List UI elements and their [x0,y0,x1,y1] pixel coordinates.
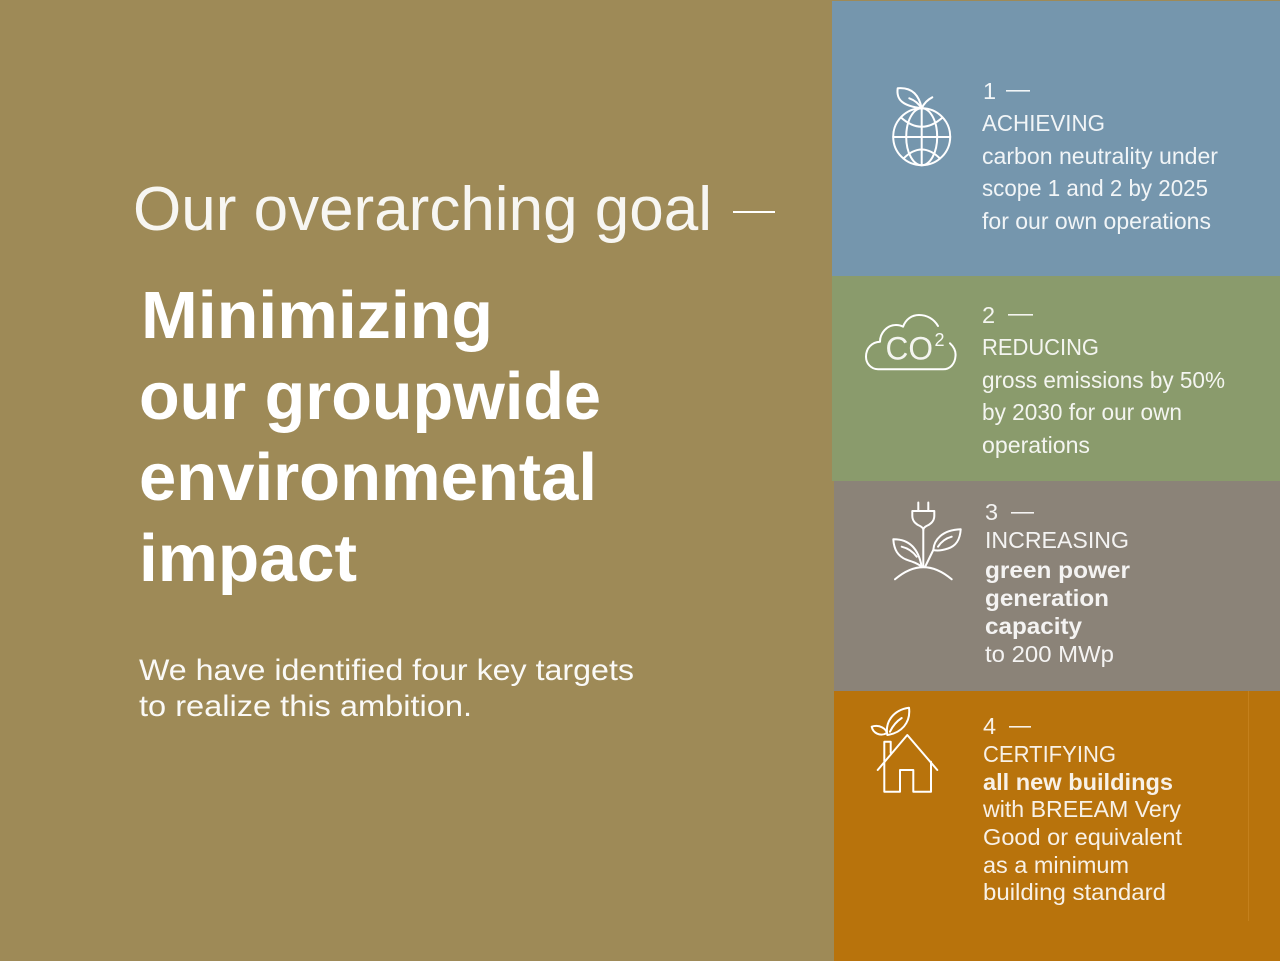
icon: CO2 cloud [866,315,956,369]
text: target 4: with BREEAM Very [982,796,1181,822]
text: target 2: gross emissions by 50% [982,367,1225,393]
main heading: environmental [139,440,597,515]
text: target 1: ACHIEVING [982,110,1105,136]
text: target 3: to 200 MWp [985,641,1114,667]
text: target 1: 1 [983,78,996,104]
text: target 4: all new buildings [983,769,1173,795]
text: target 4: Good or equivalent [983,824,1182,850]
intro text [139,654,634,723]
text: target 4: 4 [983,713,996,739]
text: target 1: for our own operations [982,208,1211,234]
text: target 2: REDUCING [982,334,1099,360]
text: target 3: 3 [985,499,998,525]
panel 3: increasing [834,481,1280,691]
panel 1: achieving [832,1,1280,276]
text: target 3: capacity [985,613,1082,639]
text: target 3: generation [985,585,1109,611]
text: target 2: 2 [982,302,995,328]
icon: house with leaves [872,708,937,792]
icon: plug plant [893,502,961,579]
text: target 3: green power [985,557,1130,583]
icon: apple globe [893,88,950,165]
text: target 1 [982,78,1218,234]
text: target 1: scope 1 and 2 by 2025 [982,175,1208,201]
icon: CO2 cloud: 2 [934,330,945,350]
text: target 4 [982,713,1182,905]
intro text: We have identified four key targets [139,654,634,687]
main heading: Minimizing [141,278,493,353]
text: target 3: INCREASING [985,527,1129,553]
text: target 4: as a minimum [983,852,1129,878]
text: target 4: building standard [983,879,1166,905]
panel 4: certifying [834,691,1280,961]
text: target 4: CERTIFYING [983,741,1116,767]
eyebrow heading: Our overarching goal [133,175,712,244]
text: target 2: operations [982,432,1090,458]
main heading [139,278,601,596]
panel: left goal statement [133,175,775,723]
main heading: our groupwide [139,359,601,434]
text: target 2: by 2030 for our own [982,399,1182,425]
main heading: impact [139,521,357,596]
text: target 1: carbon neutrality under [982,143,1218,169]
intro text: to realize this ambition. [139,690,472,723]
panel 2: reducing [832,276,1280,481]
icon: CO2 cloud: CO [886,330,933,366]
text: target 3 [985,499,1130,667]
text: target 2 [982,302,1225,458]
